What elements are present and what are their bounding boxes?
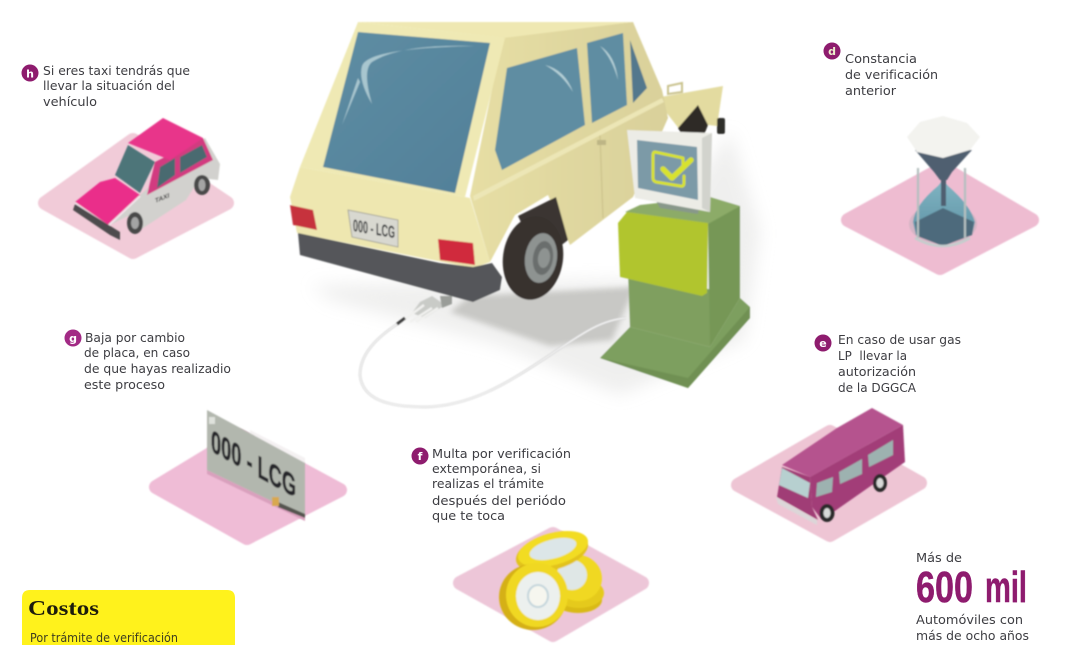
statistic: 600 mil: mil bbox=[985, 563, 1027, 612]
text: por trámite: Por trámite de verificación bbox=[30, 631, 178, 645]
text g: este proceso bbox=[84, 377, 165, 392]
statistic: 600 mil: 600 bbox=[916, 563, 973, 612]
monitor bbox=[627, 130, 712, 214]
text f: realizas el trámite bbox=[432, 476, 544, 491]
icon: license plate bbox=[207, 410, 305, 521]
license plate on car bbox=[348, 210, 398, 247]
text f: Multa por verificación bbox=[432, 446, 571, 461]
hood and front of car bbox=[655, 83, 725, 135]
badge e bbox=[814, 334, 832, 352]
text e: En caso de usar gas bbox=[838, 332, 961, 347]
badge h: h bbox=[26, 68, 34, 80]
badge f bbox=[412, 448, 428, 464]
pink tile under plate bbox=[156, 436, 340, 538]
icon: pink taxi bbox=[73, 118, 220, 240]
kiosk column front bbox=[628, 270, 712, 347]
item h: taxi bbox=[22, 63, 227, 252]
icon: stack of coins bbox=[499, 524, 607, 630]
badge d: d bbox=[828, 45, 836, 58]
car rear body bbox=[290, 167, 490, 268]
text d bbox=[845, 51, 938, 98]
lime panel bbox=[618, 212, 708, 296]
icon: pink taxi: TAXI bbox=[155, 192, 169, 205]
text g: Baja por cambio bbox=[85, 330, 185, 345]
text e bbox=[838, 332, 961, 395]
check mark icon bbox=[653, 152, 691, 186]
icon: hourglass bbox=[907, 116, 980, 246]
text f: después del periódo bbox=[432, 493, 566, 508]
verification kiosk bbox=[600, 130, 750, 388]
text h bbox=[43, 63, 190, 109]
text g bbox=[84, 330, 231, 392]
heading: costos: Costos bbox=[28, 596, 99, 620]
icon: van bbox=[776, 408, 905, 525]
license plate on car: 000 - LCG bbox=[353, 216, 395, 242]
car body side bbox=[470, 22, 668, 262]
car roof bbox=[358, 22, 633, 38]
car ground shadow bbox=[310, 130, 760, 395]
badge d bbox=[824, 42, 840, 60]
panel: costos bbox=[22, 590, 235, 645]
badge e: e bbox=[819, 337, 827, 350]
text d: Constancia bbox=[845, 51, 917, 66]
statistic: 600 mil: Más de bbox=[916, 550, 962, 565]
pink tile under taxi bbox=[45, 140, 227, 252]
illustration: inspected car with verification kiosk bbox=[290, 22, 760, 407]
text h: vehículo bbox=[43, 94, 97, 109]
rear window bbox=[323, 32, 490, 193]
text e: autorización bbox=[838, 364, 916, 379]
pink tile under van bbox=[738, 432, 920, 535]
item d: hourglass bbox=[824, 42, 1032, 268]
text f: que te toca bbox=[432, 508, 505, 523]
statistic: 600 mil: más de ocho años bbox=[916, 628, 1029, 643]
item g: license plate bbox=[64, 330, 340, 538]
text f: extemporánea, si bbox=[432, 461, 541, 476]
pink tile under coins bbox=[460, 534, 642, 635]
badge g: g bbox=[69, 332, 77, 345]
text h: Si eres taxi tendrás que bbox=[43, 63, 190, 78]
gas analyzer cable bbox=[360, 318, 626, 407]
rear bumper bbox=[298, 233, 502, 302]
item e: van bbox=[738, 332, 961, 535]
side door lines and handle bbox=[473, 98, 664, 218]
text d: anterior bbox=[845, 83, 897, 98]
car rear cabin frame bbox=[300, 22, 505, 197]
statistic: 600 mil bbox=[916, 550, 1029, 643]
text g: de que hayas realizadio bbox=[84, 361, 231, 376]
text e: de la DGGCA bbox=[838, 380, 916, 395]
badge h bbox=[22, 64, 38, 82]
text e: LP llevar la bbox=[838, 348, 907, 363]
text h: llevar la situación del bbox=[43, 78, 175, 93]
kiosk column top bbox=[625, 197, 740, 224]
kiosk column side bbox=[708, 206, 740, 347]
item f: coins bbox=[412, 446, 642, 635]
text f bbox=[432, 446, 571, 523]
kiosk base bbox=[600, 298, 750, 388]
taillights bbox=[290, 205, 475, 265]
rear tire bbox=[497, 197, 569, 304]
text d: de verificación bbox=[845, 67, 938, 82]
badge g bbox=[64, 330, 82, 346]
pink tile under hourglass bbox=[848, 168, 1032, 268]
side windows bbox=[495, 33, 647, 170]
statistic: 600 mil: Automóviles con bbox=[916, 612, 1023, 627]
exhaust pipes bbox=[404, 296, 452, 322]
badge f: f bbox=[418, 450, 423, 463]
icon: license plate: 000 - LCG bbox=[211, 424, 296, 505]
text g: de placa, en caso bbox=[84, 345, 190, 360]
